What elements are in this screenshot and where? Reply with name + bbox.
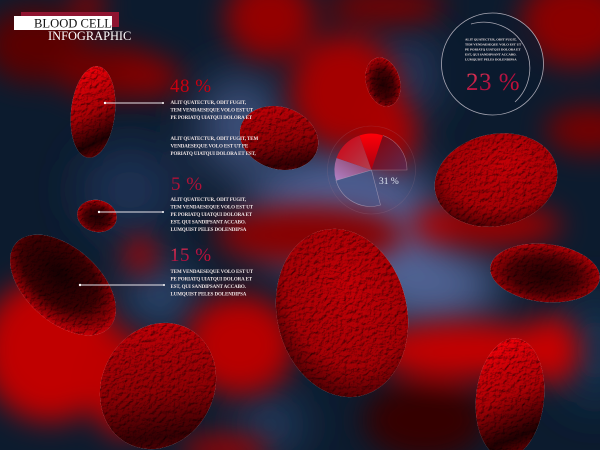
stat block: 5 % [170, 174, 254, 233]
circular callout: 23 %: LUMQUIST PELES DOLENDIPSA [465, 58, 517, 62]
stat block: 48 %: TEM VENDAESEQUE VOLO EST UT [170, 108, 254, 114]
text block: middle paragraph [170, 137, 258, 157]
leader line: 15 % [79, 284, 165, 286]
stat block: 5 %: LUMQUIST PELES DOLENDIPSA [170, 228, 247, 233]
stat block: 15 % [170, 245, 254, 298]
blood cell: bottom left [78, 302, 238, 450]
circular callout: 23 % [442, 13, 544, 115]
stat block: 5 %: EST, QUI SANDIPSANT ACCABO. [170, 220, 247, 226]
pie chart: 31 % [328, 126, 416, 214]
blood cell: left tilted [0, 215, 135, 355]
text block: middle paragraph: ALIT QUATECTUR, ODIT FUGIT, TEM [170, 137, 258, 142]
text block: middle paragraph: PORIATQ UIATQUI DOLORA ET EST, [170, 152, 256, 157]
pie chart: 31 %: 31 % [379, 177, 399, 187]
stat block: 5 %: 5 % [171, 174, 203, 195]
blood cell: bottom right [470, 335, 550, 450]
title: INFOGRAPHIC [48, 29, 131, 43]
stat block: 48 %: PE PORIATQ UIATQUI DOLORA ET [170, 116, 253, 121]
stat block: 15 %: TEM VENDAESEQUE VOLO EST UT [170, 270, 254, 275]
text block: middle paragraph: VENDAESEQUE VOLO EST UT PE [170, 144, 249, 150]
stat block: 5 %: TEM VENDAESEQUE VOLO EST UT [170, 206, 254, 210]
blood cell: center top [231, 96, 327, 180]
circular callout: 23 %: EST, QUI SANDIPSANT ACCABO. [465, 52, 517, 56]
stat block: 15 %: EST, QUI SANDIPSANT ACCABO. [170, 285, 247, 290]
blood cell: tiny left [74, 196, 120, 236]
leader line: 5 % [98, 211, 164, 213]
circular callout: 23 %: PE PORIATQ UIATQUI DOLORA ET [465, 48, 521, 52]
blood cell: right flat [487, 238, 600, 308]
leader line: 48 % [104, 102, 164, 104]
stat block: 48 % [170, 76, 254, 121]
blood cell: large center [260, 216, 424, 410]
blood cell: upper right [426, 122, 566, 238]
stat block: 15 %: 15 % [170, 245, 212, 266]
circular callout: 23 %: 23 % [466, 69, 520, 96]
title [14, 12, 131, 43]
stat block: 48 %: ALIT QUATECTUR, ODIT FUGIT, [170, 101, 247, 106]
blood cell: upper left [66, 64, 120, 160]
blood cell: small top [360, 53, 406, 111]
title: BLOOD CELL [34, 16, 112, 30]
circular callout: 23 %: ALIT QUATECTUR, ODIT FUGIT, [465, 38, 517, 42]
stat block: 15 %: LUMQUIST PELES DOLENDIPSA [170, 292, 247, 298]
stat block: 5 %: ALIT QUATECTUR, ODIT FUGIT, [170, 198, 247, 203]
stat block: 15 %: PE PORIATQ UIATQUI DOLORA ET [170, 278, 253, 282]
circular callout: 23 %: TEM VENDAESEQUE VOLO EST UT [465, 42, 522, 46]
stat block: 48 %: 48 % [170, 76, 212, 97]
stat block: 5 %: PE PORIATQ UIATQUI DOLORA ET [170, 213, 253, 218]
